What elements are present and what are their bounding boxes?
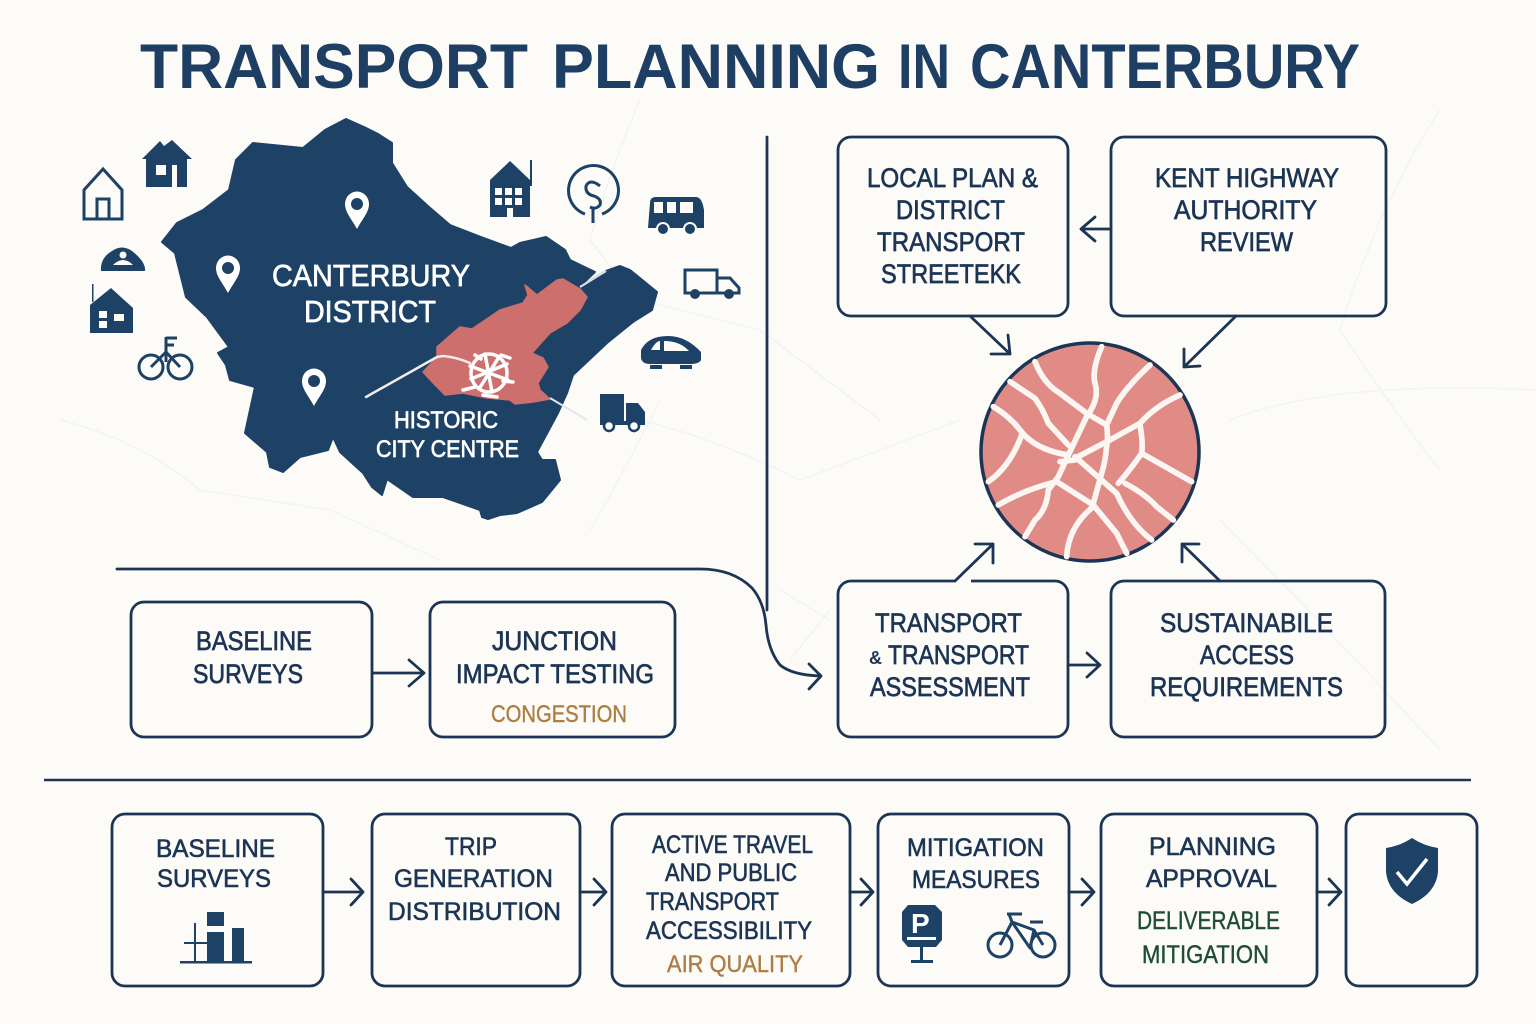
city centre zone	[423, 279, 587, 404]
label: Historic City Centre: HISTORIC	[394, 407, 498, 434]
step: Planning Approval: DELIVERABLE	[1137, 907, 1280, 935]
step: Planning Approval: APPROVAL	[1146, 865, 1277, 893]
arrow: surveys to junction testing	[373, 660, 424, 686]
box: Transport Assessment: &	[869, 648, 882, 668]
box: Transport Assessment	[838, 581, 1068, 737]
arrow: step 1 to 2	[323, 879, 363, 905]
box: Local Plan: STREETEKK	[881, 259, 1021, 289]
step: Active Travel: AND PUBLIC	[665, 859, 797, 887]
box: Kent Highway Authority Review	[1111, 137, 1386, 316]
panel: district map	[84, 119, 739, 519]
step: Mitigation Measures: MITIGATION	[907, 834, 1044, 862]
step: Mitigation Measures	[878, 814, 1069, 986]
arrow: Local Plan to street circle	[970, 316, 1010, 354]
icon: car	[641, 336, 701, 369]
box: Transport Assessment: TRANSPORT	[888, 640, 1029, 670]
box: Local Plan: LOCAL PLAN &	[867, 163, 1038, 193]
box: Transport Assessment: TRANSPORT	[875, 608, 1022, 638]
label: Canterbury District: DISTRICT	[304, 294, 436, 329]
title	[140, 32, 1360, 102]
icon: historic centre wheel	[463, 354, 513, 397]
label: Canterbury District	[272, 258, 470, 329]
step: Trip Generation Distribution: DISTRIBUTION	[388, 898, 561, 926]
map: Canterbury district	[162, 119, 657, 519]
step: Active Travel: TRANSPORT	[646, 888, 779, 916]
arrow: Kent review to Local Plan	[1081, 217, 1111, 241]
box: Sustainable Access Requirements: REQUIREMENTS	[1150, 672, 1343, 702]
icon: dollar sign tree	[568, 165, 619, 223]
box: Kent Highway Authority Review: REVIEW	[1200, 227, 1293, 257]
icon: small house with chimney	[90, 284, 133, 333]
icon: outline house	[84, 169, 122, 219]
box: Sustainable Access Requirements: ACCESS	[1200, 640, 1294, 670]
box: Local Plan: TRANSPORT	[877, 227, 1025, 257]
icon: map pin west	[216, 256, 240, 293]
street network circle	[981, 343, 1199, 561]
step: Trip Generation Distribution	[372, 814, 580, 986]
box: Kent Highway Authority Review: KENT HIGHWAY	[1155, 163, 1339, 193]
step: Trip Generation Distribution: GENERATION	[394, 865, 553, 893]
arrow: step 3 to 4	[850, 879, 873, 905]
icon: bar chart	[180, 912, 252, 964]
title: PLANNING	[552, 32, 880, 102]
icon: hill shelter	[101, 248, 145, 271]
step: Mitigation Measures: MEASURES	[912, 866, 1040, 894]
box: Kent Highway Authority Review: AUTHORITY	[1174, 195, 1317, 225]
arrow: step 2 to 3	[580, 879, 606, 905]
title: IN	[898, 32, 950, 102]
box: Transport Assessment: ASSESSMENT	[870, 672, 1030, 702]
box: Junction Impact Testing: IMPACT TESTING	[456, 659, 654, 689]
icon: parking sign: P	[911, 908, 930, 939]
arrow: assessment to street circle	[955, 544, 993, 581]
step: Planning Approval: MITIGATION	[1142, 941, 1269, 969]
step: Active Travel: ACCESSIBILITY	[646, 917, 812, 945]
label: Canterbury District: CANTERBURY	[272, 258, 470, 293]
step: Planning Approval	[1101, 814, 1317, 986]
box: Baseline Surveys	[131, 602, 372, 737]
box: Baseline Surveys: BASELINE	[196, 626, 312, 656]
box: Sustainable Access Requirements	[1111, 581, 1385, 737]
icon: shield with check	[1386, 838, 1438, 904]
step: Trip Generation Distribution: TRIP	[445, 833, 497, 861]
icon: map pin north	[345, 192, 369, 229]
icon: map pin south	[302, 368, 326, 406]
step: Baseline Surveys: BASELINE	[156, 835, 275, 863]
title: CANTERBURY	[970, 32, 1360, 102]
label: Historic City Centre	[376, 407, 519, 463]
box: Baseline Surveys: SURVEYS	[193, 659, 303, 689]
icon: bus	[648, 197, 704, 235]
step: Baseline Surveys	[112, 814, 323, 986]
connector: vertical and curved line into transport assessment	[117, 137, 821, 689]
icon: parking sign	[902, 905, 942, 963]
box: Local Plan: DISTRICT	[896, 195, 1005, 225]
arrow: step 5 to 6	[1317, 879, 1341, 905]
box: Sustainable Access Requirements: SUSTAINABILE	[1160, 608, 1333, 638]
divider	[44, 779, 1471, 781]
icon: bicycle	[988, 914, 1055, 957]
step: Active Travel: AIR QUALITY	[667, 951, 803, 978]
icon: apartment building	[490, 160, 532, 217]
step: Active Travel: ACTIVE TRAVEL	[652, 831, 813, 859]
title: TRANSPORT	[140, 32, 528, 102]
step: Planning Approval: PLANNING	[1149, 833, 1276, 861]
step: Active Travel	[612, 814, 850, 986]
label: Historic City Centre: CITY CENTRE	[376, 436, 519, 463]
box: Local Plan	[838, 137, 1068, 316]
icon: delivery lorry	[685, 270, 739, 299]
icon: small truck	[600, 394, 645, 431]
step: approved shield	[1346, 814, 1477, 986]
icon: filled house	[142, 140, 192, 187]
arrow: sustainable access to street circle	[1182, 544, 1220, 581]
box: Junction Impact Testing: JUNCTION	[492, 626, 617, 656]
step: Baseline Surveys: SURVEYS	[157, 865, 271, 893]
arrow: Kent review to street circle	[1184, 316, 1236, 367]
box: Junction Impact Testing	[430, 602, 675, 737]
box: Junction Impact Testing: CONGESTION	[491, 701, 627, 728]
arrow: assessment to sustainable access	[1068, 653, 1100, 677]
arrow: step 4 to 5	[1069, 879, 1094, 905]
icon: bicycle	[139, 337, 192, 379]
